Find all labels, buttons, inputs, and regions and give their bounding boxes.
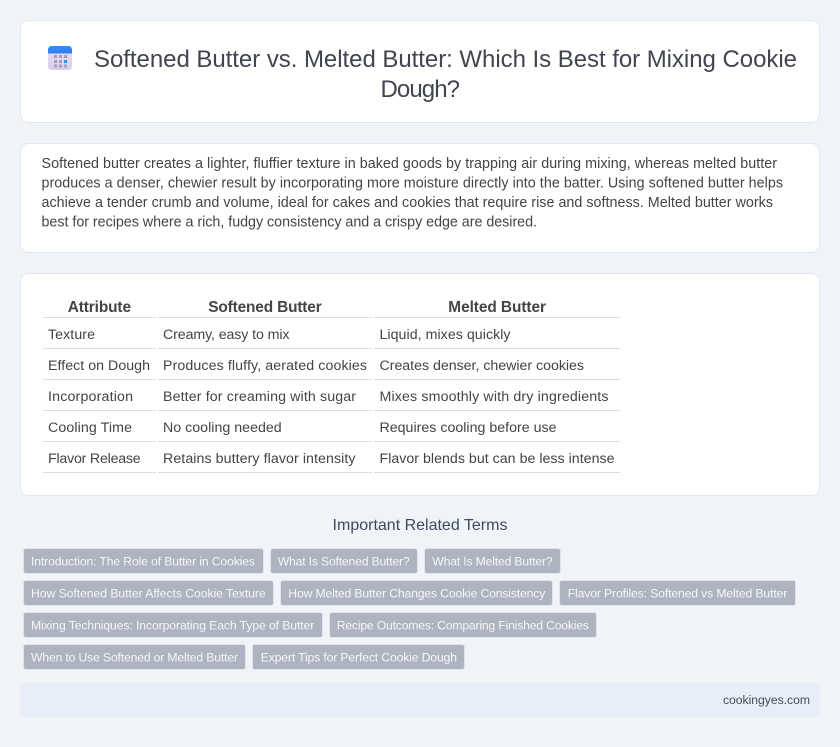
row: incorporation: Mixes smoothly with dry ingredients — [380, 389, 608, 405]
row: texture: Creamy, easy to mix — [163, 327, 290, 343]
row: texture: Texture — [48, 327, 95, 343]
tag: introduction: Introduction: The Role of Butter in Cookies — [31, 554, 255, 568]
title: Softened Butter vs. Melted Butter: Which Is Best for Mixing Cookie — [94, 46, 797, 73]
row: effect on dough: Effect on Dough — [48, 358, 150, 374]
intro paragraph: best for recipes where a rich, fudgy consistency and a crispy edge are desired. — [42, 214, 537, 230]
tag: what is softened butter — [270, 548, 418, 574]
row: effect on dough — [43, 358, 620, 380]
row: incorporation: Incorporation — [48, 389, 133, 405]
tag: expert tips: Expert Tips for Perfect Cookie Dough — [261, 650, 457, 664]
related terms heading: Important Related Terms — [333, 517, 507, 534]
tag: flavor profiles — [560, 580, 796, 606]
intro paragraph: Softened butter creates a lighter, fluffier texture in baked goods by trapping air during mixing, whereas melted butter — [42, 156, 777, 172]
row: effect on dough: Creates denser, chewier cookies — [380, 358, 584, 374]
tag: recipe outcomes: Recipe Outcomes: Comparing Finished Cookies — [337, 618, 589, 632]
tag: flavor profiles: Flavor Profiles: Softened vs Melted Butter — [568, 586, 787, 600]
tag: recipe outcomes — [330, 612, 596, 638]
tag: softened texture: How Softened Butter Affects Cookie Texture — [31, 586, 266, 600]
row: cooling time: No cooling needed — [163, 420, 282, 436]
icon: calendar — [48, 46, 72, 70]
panel: title card — [20, 20, 820, 122]
tag: when to use — [24, 644, 246, 670]
row: cooling time: Cooling Time — [48, 420, 132, 436]
table header row: Melted Butter — [448, 299, 546, 316]
footer bar — [20, 683, 820, 717]
tag: what is melted butter — [424, 548, 560, 574]
row: flavor release: Flavor blends but can be less intense — [380, 451, 615, 467]
row: cooling time: Requires cooling before use — [380, 420, 557, 436]
row: flavor release — [43, 451, 620, 472]
table header row — [43, 299, 620, 318]
row: flavor release: Flavor Release — [48, 451, 141, 467]
tag: when to use: When to Use Softened or Melted Butter — [31, 650, 238, 664]
table header row: Attribute — [68, 299, 131, 316]
panel: comparison table — [20, 274, 820, 496]
tag: what is softened butter: What Is Softened Butter? — [278, 554, 410, 568]
tag: what is melted butter: What Is Melted Butter? — [432, 554, 553, 568]
table header row: Softened Butter — [208, 299, 322, 316]
row: texture — [43, 327, 620, 348]
intro paragraph — [42, 156, 783, 230]
row: flavor release: Retains buttery flavor intensity — [163, 451, 356, 467]
tag: softened texture — [24, 580, 274, 606]
intro paragraph: achieve a tender crumb and volume, ideal for cakes and cookies that require rise and softness. Melted butter works — [42, 195, 773, 211]
tag: melted consistency — [280, 580, 552, 606]
title: Dough? — [380, 76, 460, 103]
tag: expert tips — [252, 644, 464, 670]
row: incorporation: Better for creaming with sugar — [163, 389, 356, 405]
panel: intro — [20, 144, 820, 252]
title — [94, 46, 797, 103]
row: texture: Liquid, mixes quickly — [380, 327, 511, 343]
row: cooling time — [43, 420, 620, 442]
tag: melted consistency: How Melted Butter Changes Cookie Consistency — [288, 586, 546, 600]
tag: introduction — [24, 548, 264, 574]
tag list — [24, 548, 796, 670]
row: effect on dough: Produces fluffy, aerated cookies — [163, 358, 367, 374]
intro paragraph: produces a denser, chewier result by incorporating more moisture directly into the batter. Using softened butter helps — [42, 176, 783, 192]
tag: mixing techniques — [24, 612, 322, 638]
tag: mixing techniques: Mixing Techniques: Incorporating Each Type of Butter — [31, 618, 314, 632]
row: incorporation — [43, 389, 620, 410]
footer source: cookingyes.com — [723, 693, 810, 707]
